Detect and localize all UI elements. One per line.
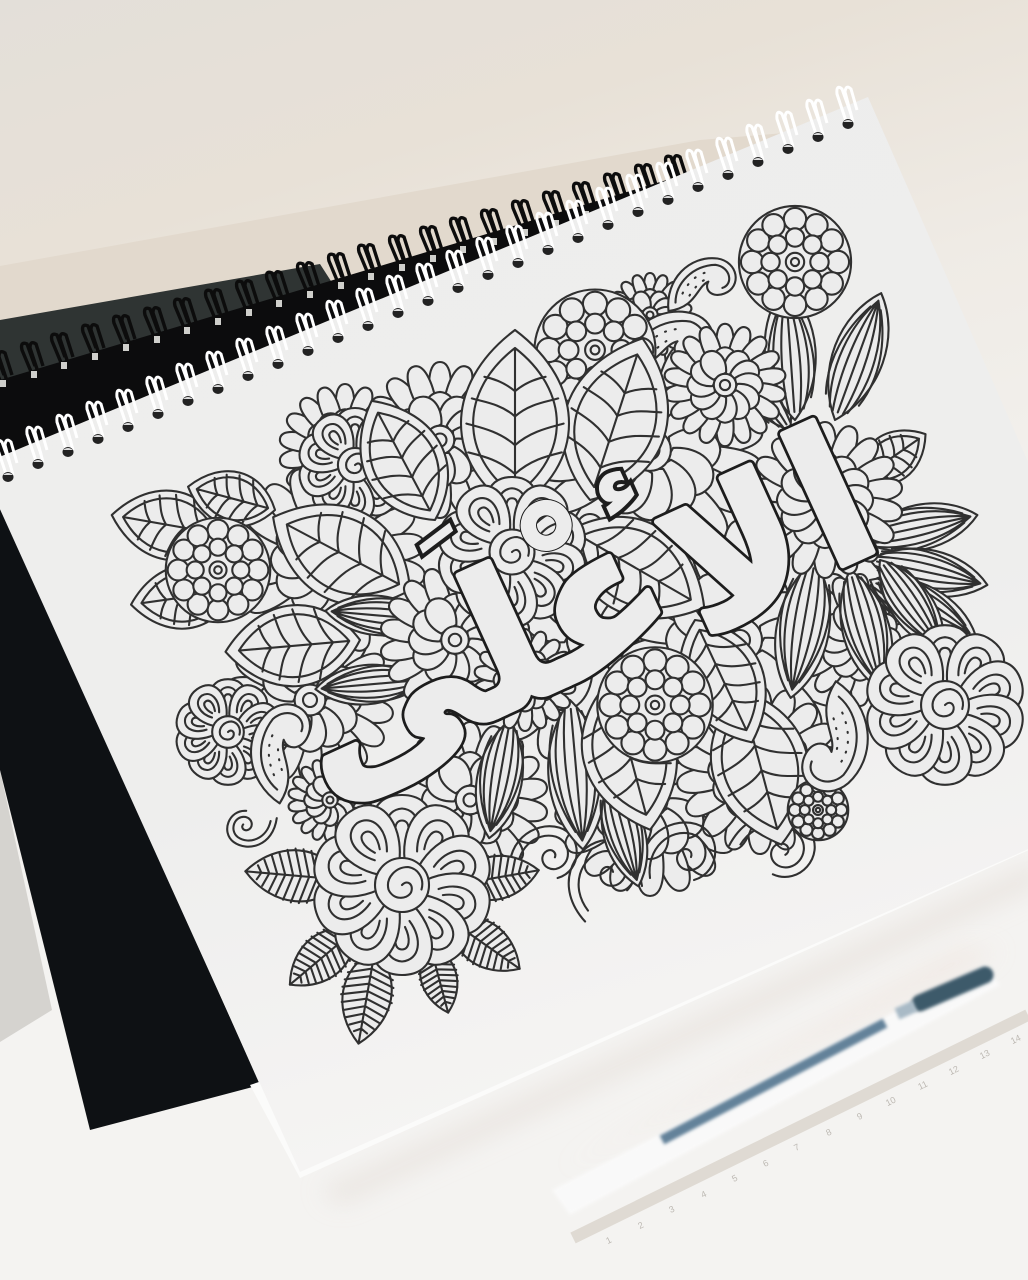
upper right pointed leaves bbox=[714, 284, 905, 441]
ruler numbers: 10 bbox=[884, 1095, 897, 1108]
beige notebook behind bbox=[0, 130, 820, 560]
title fill layer bbox=[250, 379, 908, 847]
ruler numbers: 6 bbox=[761, 1158, 770, 1169]
ruler numbers: 9 bbox=[855, 1111, 864, 1122]
title outline layer: ا bbox=[755, 385, 906, 613]
center left half daisy bbox=[379, 565, 531, 715]
title sukun mark: ْ bbox=[489, 483, 647, 715]
background daisies filling gaps bbox=[225, 273, 927, 896]
black spiral binding bbox=[0, 156, 687, 387]
left shell flower bbox=[295, 408, 415, 522]
left leaves bbox=[106, 461, 282, 636]
black notebook rear bbox=[0, 500, 260, 1130]
left scale dome bbox=[166, 518, 270, 622]
ruler bbox=[573, 1015, 1028, 1246]
ruler numbers bbox=[604, 1033, 1022, 1246]
center right leaf bbox=[547, 490, 727, 648]
page shadow bbox=[320, 860, 1028, 1205]
center scale dome bbox=[597, 647, 713, 763]
pen tip bbox=[897, 1006, 915, 1014]
pen ink refill bbox=[662, 1023, 885, 1140]
ruler numbers: 14 bbox=[1009, 1033, 1022, 1046]
pen bbox=[552, 950, 1000, 1215]
title fill layer: ا bbox=[755, 385, 906, 613]
title fill layer: على bbox=[250, 470, 705, 837]
grey notebook lower left bbox=[0, 770, 52, 1042]
title outline layer: على bbox=[250, 470, 705, 837]
ruler numbers: 12 bbox=[947, 1064, 960, 1077]
right bottom flower bbox=[861, 625, 1028, 785]
title: Arabic word bbox=[231, 337, 908, 847]
top scale dome bbox=[534, 290, 656, 410]
title hamza mark: ء bbox=[573, 432, 654, 540]
top leaves bbox=[336, 323, 691, 539]
center flower bbox=[433, 477, 591, 627]
top daisy bbox=[663, 324, 787, 446]
ruler numbers: 7 bbox=[792, 1142, 801, 1153]
left big leaves bbox=[222, 476, 432, 709]
pen cap bbox=[920, 975, 985, 1003]
title fatha mark: َ bbox=[392, 498, 502, 658]
right paisley and small dome bbox=[774, 681, 894, 840]
bottom flower bbox=[307, 795, 497, 975]
pen shadow bbox=[560, 950, 1000, 1170]
title fill layer: لا bbox=[633, 431, 841, 677]
title outline layer bbox=[250, 379, 908, 847]
ruler numbers: 8 bbox=[824, 1127, 833, 1138]
ruler numbers: 5 bbox=[730, 1173, 739, 1184]
title outline layer: لا bbox=[633, 431, 841, 677]
notebook page edge bbox=[250, 825, 1028, 1178]
ruler numbers: 11 bbox=[916, 1079, 929, 1092]
ruler numbers: 2 bbox=[636, 1220, 645, 1231]
left lower paisley bbox=[227, 694, 335, 804]
left lower flower bbox=[172, 679, 284, 785]
ruler numbers: 4 bbox=[699, 1189, 708, 1200]
ruler numbers: 1 bbox=[604, 1235, 613, 1246]
right leaf fan bbox=[765, 414, 992, 702]
dark notebook cover bbox=[0, 264, 338, 400]
white spiral binding bbox=[0, 87, 857, 482]
right daisy bbox=[746, 422, 904, 578]
black notebook spiral page bbox=[0, 164, 720, 530]
floral mandala artwork bbox=[106, 206, 1028, 1048]
center lower petals bbox=[474, 629, 576, 731]
ruler numbers: 3 bbox=[667, 1204, 676, 1215]
bottom flower leaves bbox=[243, 844, 543, 1048]
ruler numbers: 13 bbox=[978, 1048, 991, 1061]
swirls bottom bbox=[222, 796, 826, 922]
paisleys top bbox=[620, 258, 736, 385]
dome flower top right bbox=[739, 206, 851, 318]
lower center leaves bbox=[467, 603, 828, 892]
pen clear body bbox=[552, 965, 1000, 1215]
